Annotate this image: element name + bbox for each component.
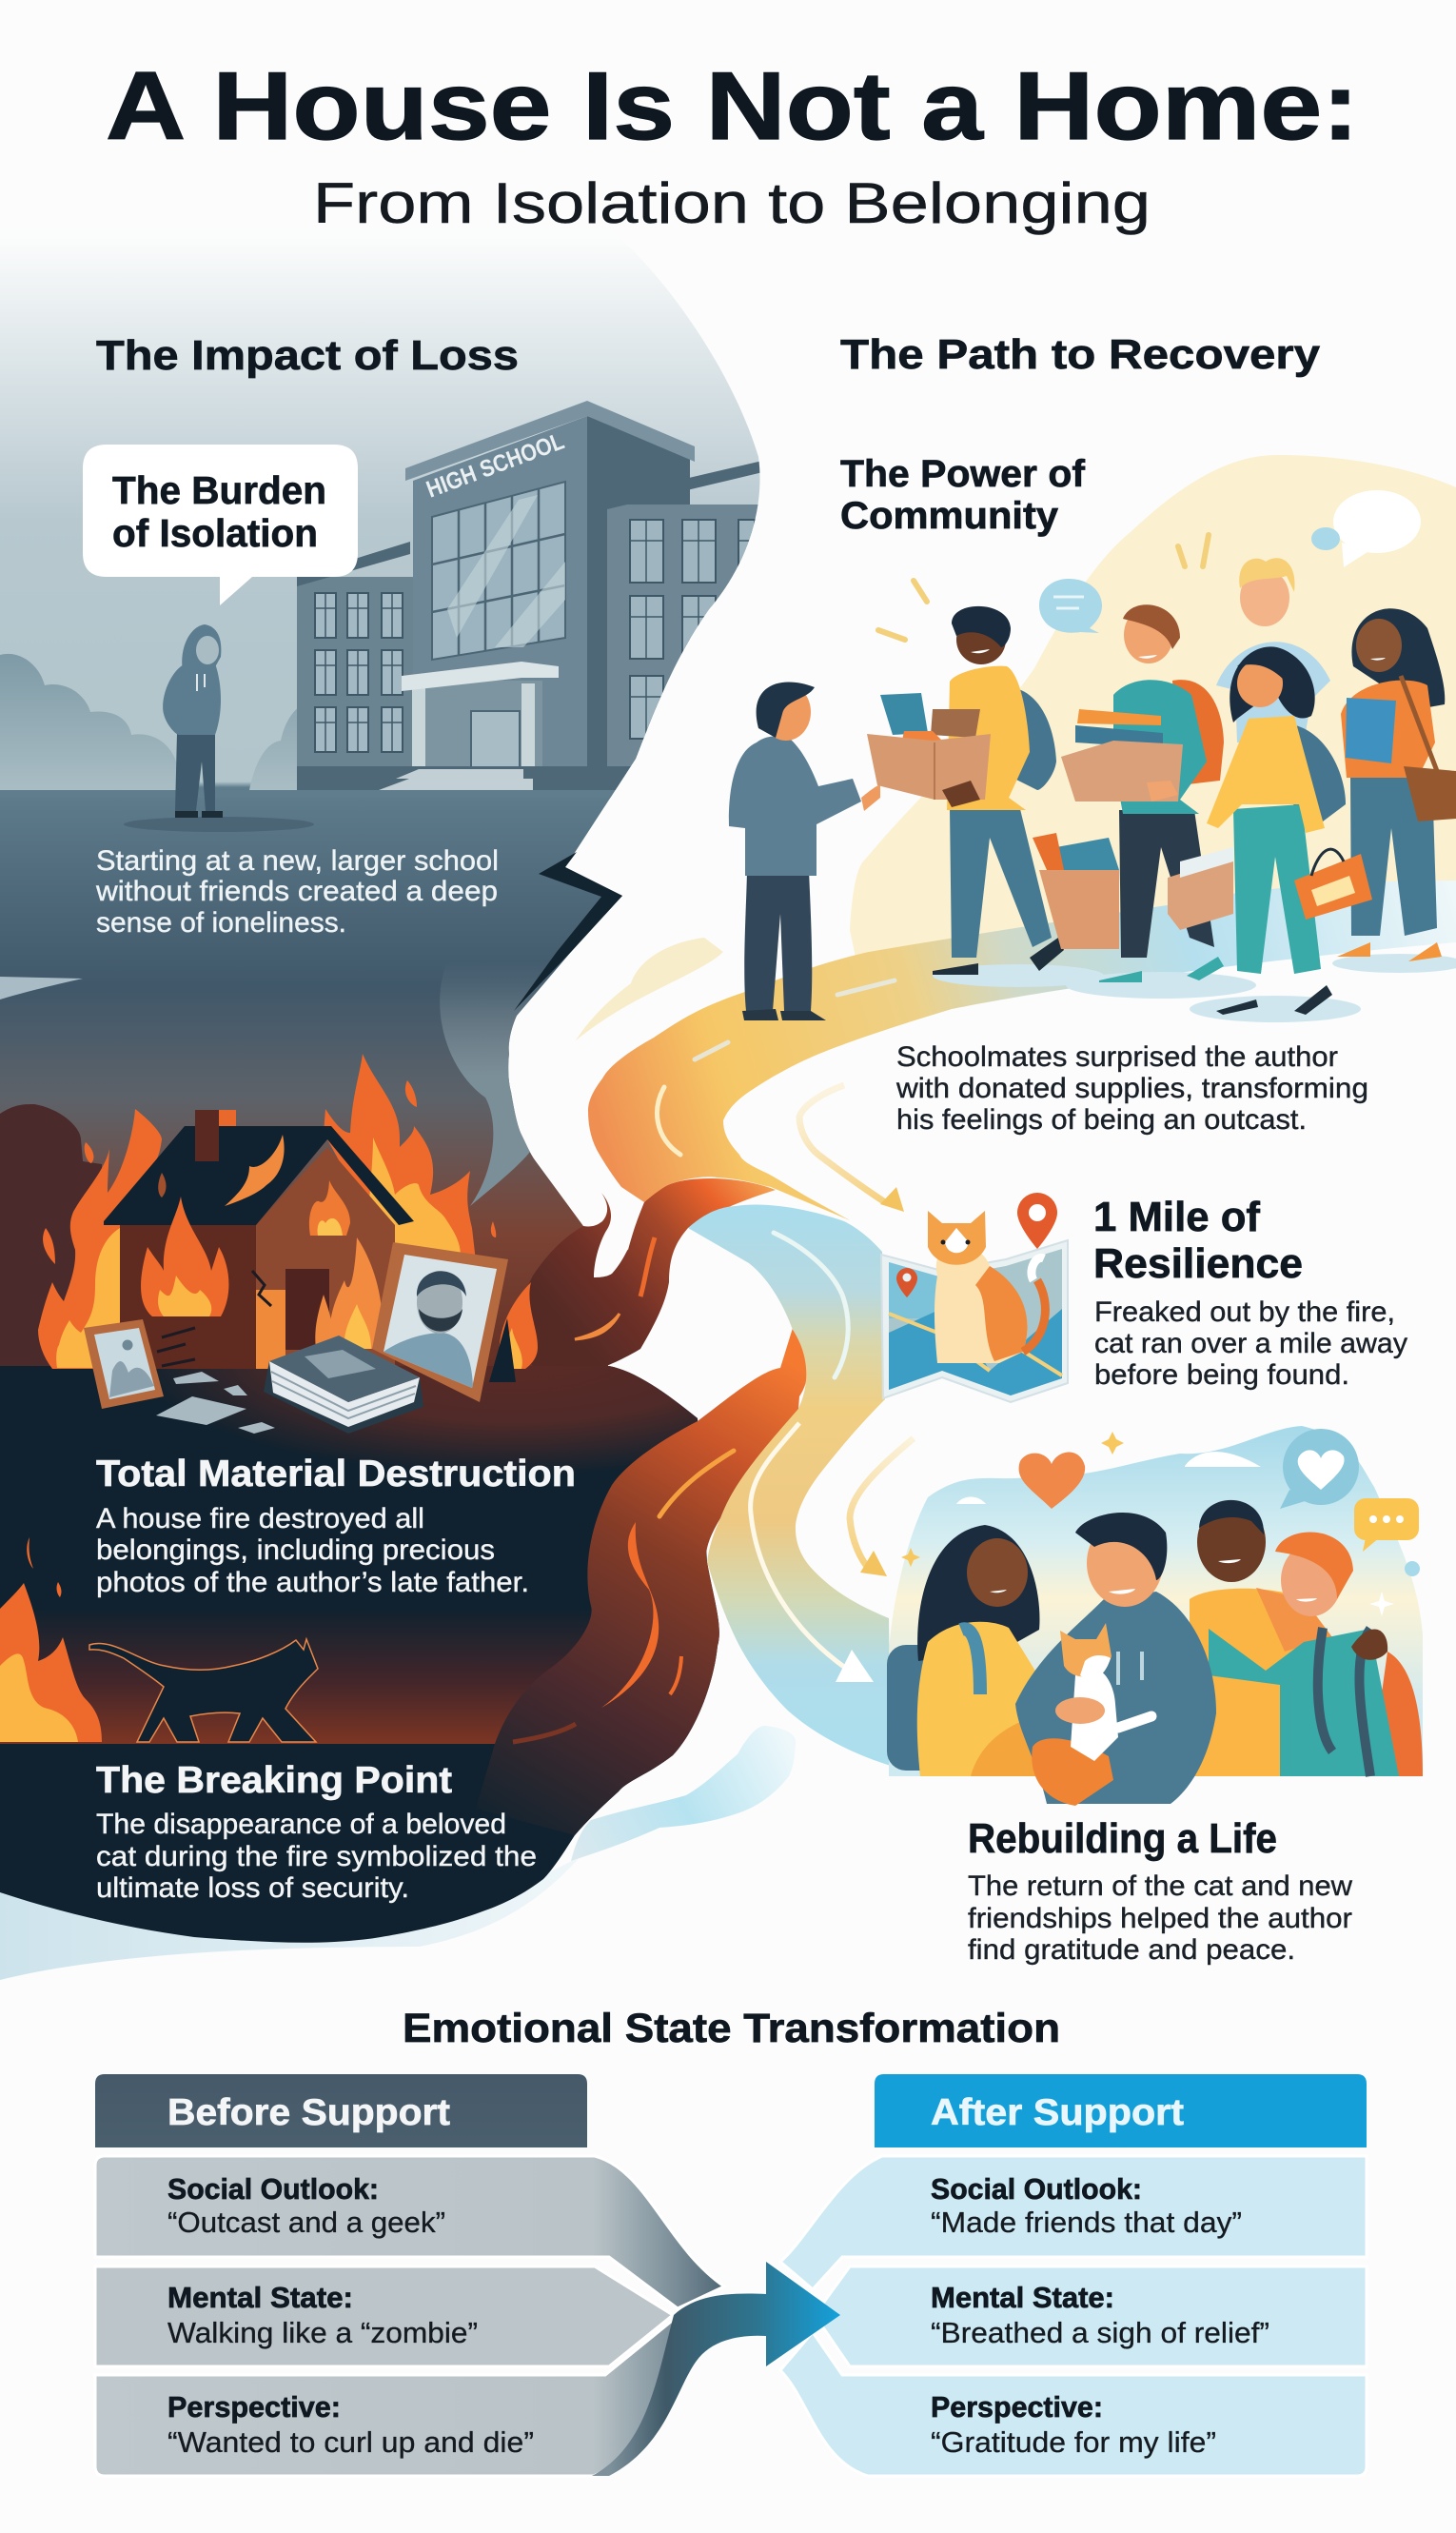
callout: burden of isolation: of Isolation (112, 511, 318, 555)
text: isolation body: Starting at a new, larger school (96, 845, 499, 877)
yellow hoodie student (867, 606, 1064, 975)
lower fire band (0, 1609, 609, 1744)
text: 1 mile of resilience: 1 Mile of (1093, 1194, 1260, 1240)
heading: power of community (840, 453, 1086, 537)
main block side (587, 416, 690, 790)
panel: before support: Mental State: (167, 2281, 353, 2314)
side flame (329, 1237, 384, 1349)
panel: dark fire ground (0, 1366, 719, 1943)
panel: before support: Perspective: (167, 2390, 341, 2424)
text: 1 mile of resilience (1093, 1194, 1407, 1391)
text: total material destruction (96, 1454, 576, 1598)
school building (297, 401, 778, 790)
text: 1 mile of resilience: before being found. (1094, 1359, 1349, 1391)
text: isolation body: sense of ioneliness. (96, 907, 346, 939)
main block front (413, 416, 587, 790)
panel: after support: “Gratitude for my life” (931, 2425, 1216, 2459)
left girl (887, 1525, 1044, 1776)
arrow: transformation (592, 2262, 840, 2476)
friends backdrop blob (889, 1426, 1423, 1776)
ground strip (611, 790, 615, 798)
text: breaking point: The Breaking Point (96, 1760, 452, 1801)
fire: flames around house (38, 1054, 538, 1369)
blond student (1216, 558, 1330, 742)
text: total material destruction: Total Material Destruction (96, 1454, 576, 1494)
cheer ticks (878, 535, 1209, 640)
large pin (1017, 1193, 1057, 1249)
cream backdrop behind community (850, 455, 1456, 961)
long-hair orange student (1337, 608, 1456, 961)
text: 1 mile of resilience: Resilience (1093, 1240, 1303, 1287)
smoke wisp (440, 961, 571, 1206)
clouds (0, 654, 305, 790)
small photo frame (84, 1319, 164, 1409)
stream: dark flame tongue (504, 1178, 776, 1366)
panel: after support: Mental State: (931, 2281, 1114, 2314)
shadows (933, 954, 1456, 1022)
black cat silhouette (89, 1639, 318, 1742)
paper scraps (156, 1372, 275, 1434)
row shapes (780, 2156, 1367, 2476)
heading: power of community: Community (840, 495, 1059, 537)
orange-hair friend (1209, 1533, 1423, 1776)
small box and bag (1168, 847, 1372, 930)
right wing (607, 505, 758, 790)
text: rebuilding a life: find gratitude and peace. (968, 1934, 1295, 1966)
steps (379, 769, 533, 790)
cracks (157, 1271, 271, 1366)
text: community body: Schoolmates surprised the author (896, 1041, 1338, 1073)
friends illustration (887, 1429, 1423, 1806)
sign: HIGH SCHOOL (423, 427, 568, 504)
panel: after support: Social Outlook: (931, 2172, 1142, 2206)
door (285, 1269, 329, 1350)
text: community body: his feelings of being an outcast. (896, 1104, 1307, 1136)
stream: brown and orange flame river (476, 1328, 807, 1835)
callout: burden of isolation: The Burden (112, 468, 326, 512)
panel: before support: “Outcast and a geek” (167, 2206, 445, 2239)
text: isolation body (95, 845, 499, 939)
yellow shirt girl (1207, 646, 1346, 1015)
teal sweater student (1061, 604, 1224, 982)
community illustration (729, 490, 1456, 1022)
panel: before support: Before Support (167, 2092, 450, 2133)
text: rebuilding a life: Rebuilding a Life (968, 1815, 1277, 1862)
left wing (297, 577, 413, 766)
text: 1 mile of resilience: cat ran over a mile away (1094, 1328, 1407, 1359)
small pin (896, 1268, 917, 1297)
panel: after support: “Breathed a sigh of relief” (931, 2316, 1269, 2349)
panel: after support: After Support (931, 2092, 1184, 2133)
left wedge (0, 977, 83, 999)
heading: emotional state transformation: Emotional State Transformation (403, 2006, 1060, 2051)
back boy (729, 682, 880, 1020)
lonely hooded figure (124, 624, 314, 832)
text: breaking point: cat during the fire symbolized the (96, 1841, 537, 1872)
plinth (297, 766, 631, 790)
header (875, 2074, 1367, 2147)
text: breaking point: ultimate loss of security. (96, 1872, 409, 1904)
faint wisp near boy (576, 938, 723, 1040)
recovery stream (688, 1204, 891, 1766)
dark skinned friend (1190, 1500, 1332, 1776)
arrow: yellow to map (799, 1085, 904, 1212)
panel: before support: “Wanted to curl up and die” (167, 2425, 534, 2459)
text: isolation body: without friends created a deep (95, 876, 498, 907)
panel: after support: “Made friends that day” (931, 2206, 1242, 2239)
wall flame (141, 1197, 228, 1316)
cat in arms (1032, 1623, 1151, 1806)
title: A House Is Not a Home: (106, 53, 1359, 160)
panel: before support: Walking like a “zombie” (167, 2316, 478, 2349)
text: total material destruction: photos of the author’s late father. (96, 1567, 529, 1598)
text: breaking point (96, 1760, 537, 1904)
panel: before support: Social Outlook: (167, 2172, 379, 2206)
cat (935, 1246, 1028, 1363)
glass (432, 482, 565, 660)
text: community body: with donated supplies, transforming (895, 1073, 1368, 1104)
row shapes (95, 2156, 724, 2476)
pale wisps under dark panel (0, 1726, 796, 1980)
dark smoke lobe (0, 1104, 105, 1371)
crack shadow (514, 852, 622, 1011)
panel: after support (780, 2074, 1367, 2476)
text: total material destruction: A house fire destroyed all (96, 1503, 424, 1534)
icon: map with cat (881, 1193, 1068, 1402)
entrance (425, 681, 542, 766)
roof (405, 401, 695, 481)
ground box (1033, 833, 1119, 949)
arrow: yellow to friends (850, 1438, 914, 1576)
lower left flames (0, 1537, 102, 1742)
text: rebuilding a life: friendships helped the author (968, 1903, 1352, 1934)
text: breaking point: The disappearance of a beloved (96, 1809, 506, 1840)
road and yellow stream (588, 881, 1456, 1220)
centre boy (1015, 1513, 1216, 1804)
panel: upper impact-of-loss scene (0, 228, 780, 1380)
text: rebuilding a life (968, 1815, 1352, 1966)
callout: burden of isolation (83, 445, 358, 605)
burning house (104, 1110, 414, 1369)
arrow: white stream arrow (751, 1423, 874, 1682)
text: rebuilding a life: The return of the cat and new (968, 1870, 1352, 1902)
heading: power of community: The Power of (840, 453, 1086, 495)
text: community body (895, 1041, 1368, 1136)
header (95, 2074, 587, 2147)
framed photo of father (372, 1242, 516, 1402)
heading: path to recovery: The Path to Recovery (840, 331, 1321, 378)
panel: before support (95, 2074, 724, 2476)
window flame (309, 1180, 350, 1236)
decorations (901, 1429, 1420, 1616)
panel: after support: Perspective: (931, 2390, 1103, 2424)
heading: impact of loss: The Impact of Loss (96, 332, 519, 379)
text: total material destruction: belongings, including precious (96, 1534, 495, 1566)
photo album (264, 1336, 423, 1434)
subtitle: From Isolation to Belonging (313, 171, 1151, 235)
speech bubbles (1039, 490, 1421, 633)
text: 1 mile of resilience: Freaked out by the fire, (1094, 1296, 1395, 1328)
top ground glow (0, 1366, 698, 1485)
roof flame (225, 1135, 285, 1206)
